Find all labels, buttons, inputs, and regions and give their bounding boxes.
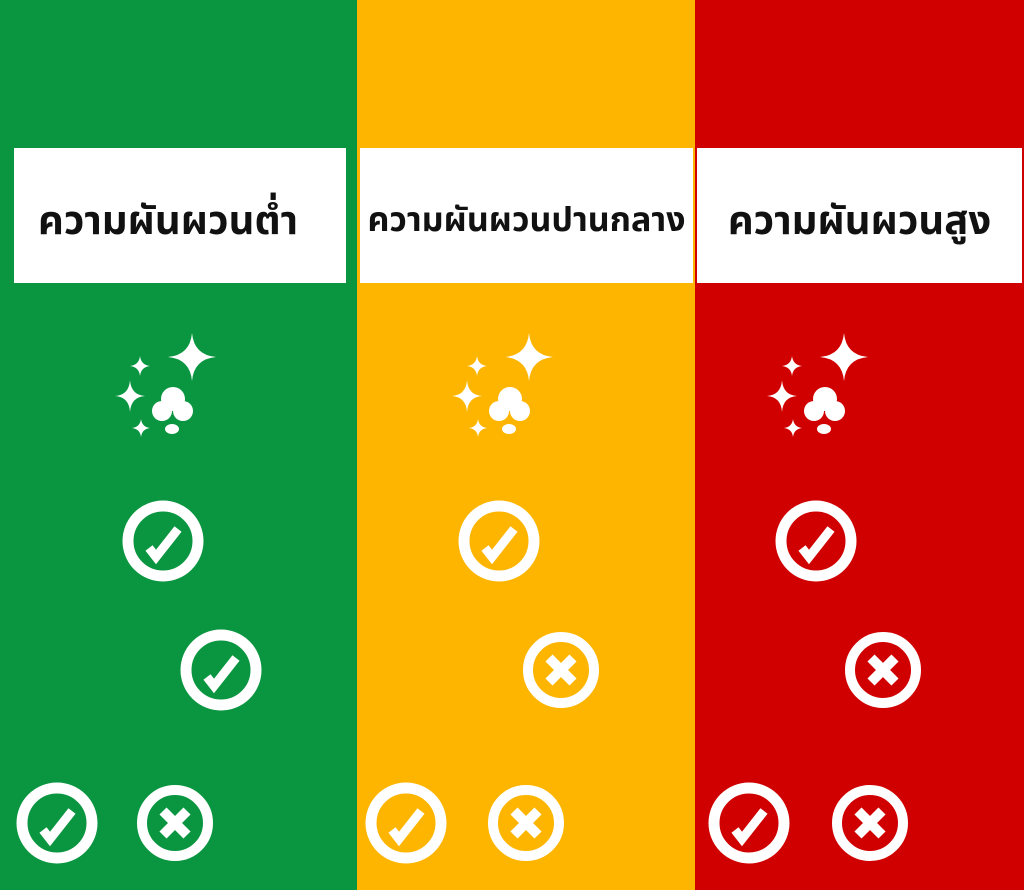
icon: cross high 1 bbox=[850, 637, 916, 703]
icon: check high 2 bbox=[714, 788, 784, 858]
icon: check low 1 bbox=[128, 506, 198, 576]
icon: check low 3 bbox=[22, 788, 92, 858]
icon: check high 1 bbox=[781, 506, 851, 576]
heading: medium: ความผันผวนปานกลาง bbox=[367, 201, 686, 239]
icon: cross low bbox=[142, 790, 208, 856]
heading: medium bbox=[360, 148, 693, 283]
heading: low bbox=[14, 148, 346, 283]
heading: high: ความผันผวนสูง bbox=[728, 198, 991, 242]
icon: cross high 2 bbox=[837, 790, 903, 856]
icon: cross medium 1 bbox=[528, 637, 594, 703]
icon: sparkles high bbox=[767, 333, 868, 437]
heading: low: ความผันผวนต่ำ bbox=[38, 198, 298, 242]
panel: low variance bbox=[0, 0, 357, 890]
heading: high bbox=[697, 148, 1022, 283]
icon: check medium 2 bbox=[371, 788, 441, 858]
panel: high variance bbox=[695, 0, 1024, 890]
icon: cross medium 2 bbox=[493, 790, 559, 856]
icon: sparkles low bbox=[115, 333, 216, 437]
icon: check medium 1 bbox=[464, 506, 534, 576]
panel: medium variance bbox=[357, 0, 695, 890]
icon: sparkles medium bbox=[452, 333, 553, 437]
icon: check low 2 bbox=[186, 635, 256, 705]
